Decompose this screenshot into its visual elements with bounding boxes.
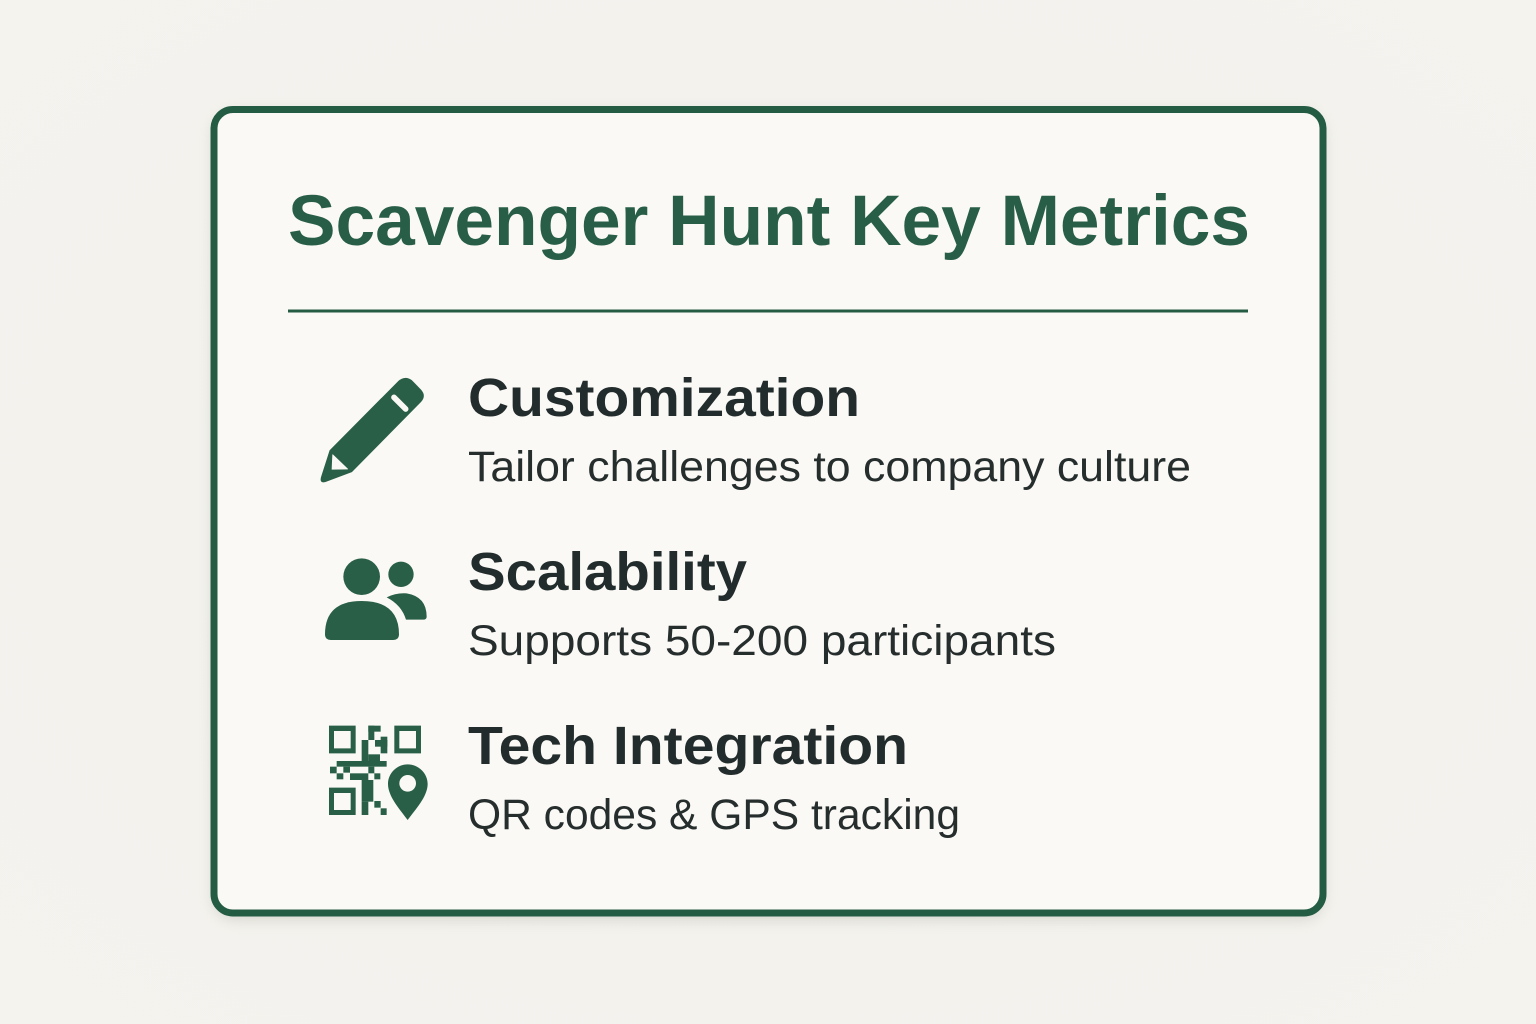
metric row: tech integration xyxy=(329,716,960,839)
icon: pencil xyxy=(321,378,423,482)
title: Scavenger Hunt Key Metrics xyxy=(288,182,1250,261)
description: scalability: Supports 50-200 participants xyxy=(468,617,1056,665)
description: customization: Tailor challenges to company culture xyxy=(468,443,1191,491)
heading: tech integration: Tech Integration xyxy=(468,716,908,776)
icon: QR code with location pin xyxy=(329,726,428,820)
heading: scalability: Scalability xyxy=(468,542,747,602)
description: tech integration: QR codes & GPS tracking xyxy=(468,791,960,839)
heading: customization: Customization xyxy=(468,368,860,428)
icon: people xyxy=(325,558,427,640)
panel: metrics card xyxy=(213,110,1324,920)
metric row: scalability xyxy=(325,542,1056,665)
metric row: customization xyxy=(321,368,1191,491)
